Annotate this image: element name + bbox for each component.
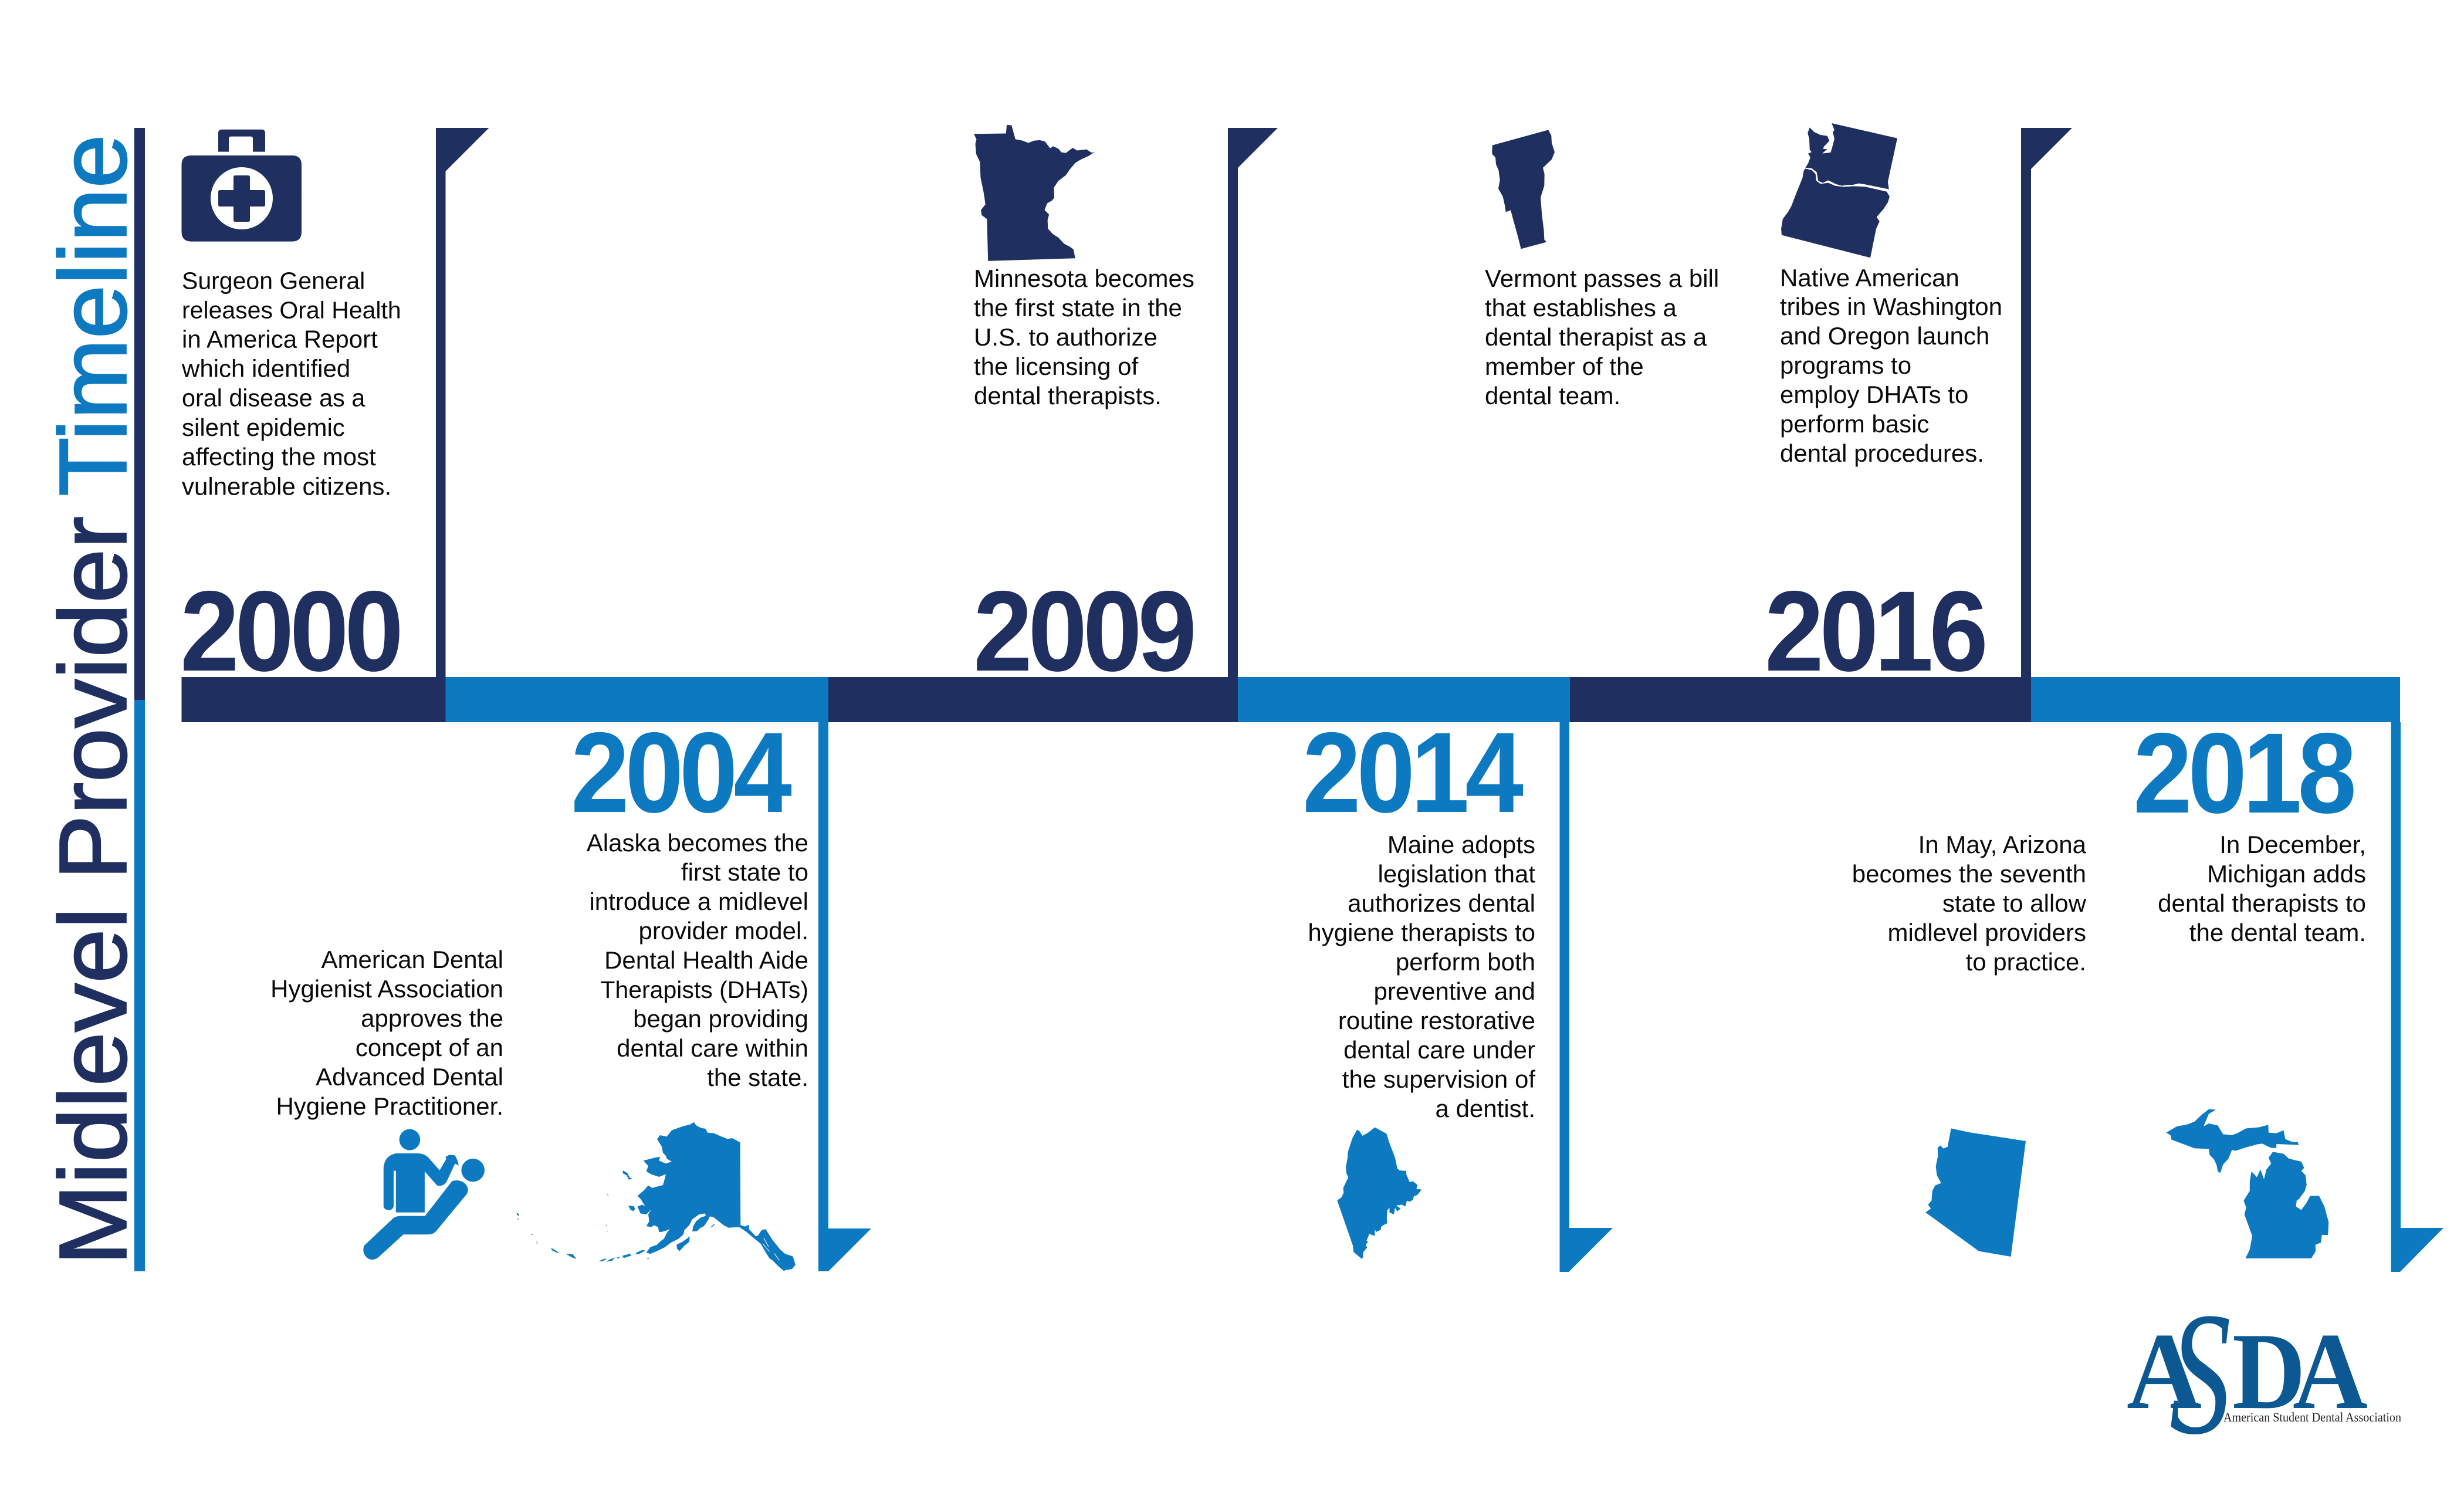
description: American Dental Hygienist Association: approves the: [361, 1004, 503, 1032]
year 2000: 2000: [180, 567, 400, 695]
description: Vermont: dental team.: [1485, 382, 1620, 409]
description 2000: which identified: [181, 354, 350, 383]
year 2016: 2016: [1765, 567, 1985, 695]
description: Maine: routine restorative: [1338, 1007, 1535, 1034]
description 2009: U.S. to authorize: [974, 323, 1157, 351]
description: Maine: hygiene therapists to: [1308, 919, 1535, 946]
panel: 2014: [1302, 708, 1613, 1272]
description: American Dental Hygienist Association: concept of an: [356, 1034, 503, 1061]
description: Arizona: state to allow: [1942, 889, 2087, 917]
description: Michigan: Michigan adds: [2207, 860, 2366, 888]
description: Maine: dental care under: [1343, 1036, 1535, 1064]
description: Maine: authorizes dental: [1348, 889, 1535, 917]
description 2016: dental procedures.: [1780, 439, 1984, 467]
description: Alaska: the state.: [707, 1064, 808, 1091]
description: Alaska: Dental Health Aide: [604, 946, 808, 974]
description: Vermont: Vermont passes a bill: [1485, 265, 1719, 292]
logo: ASDA: S: [2169, 1277, 2231, 1471]
logo: ASDA: American Student Dental Association: [2223, 1410, 2401, 1424]
description: Alaska: Therapists (DHATs): [600, 976, 808, 1003]
description: Michigan: In December,: [2219, 831, 2366, 858]
description: Arizona: to practice.: [1966, 948, 2086, 976]
description: Michigan: dental therapists to: [2158, 889, 2366, 917]
description: Arizona: midlevel providers: [1888, 919, 2086, 946]
description: American Dental Hygienist Association: Hygienist Association: [270, 975, 503, 1003]
description: American Dental Hygienist Association: Hygiene Practitioner.: [276, 1092, 503, 1120]
flag marker 2014: [1559, 722, 1613, 1272]
description: Alaska: provider model.: [639, 917, 808, 945]
year 2018: 2018: [2133, 709, 2354, 837]
description 2000: oral disease as a: [182, 385, 365, 412]
panel: 2014 Vermont: [1485, 130, 1719, 409]
description: Alaska: introduce a midlevel: [589, 888, 808, 915]
description 2000: silent epidemic: [182, 414, 345, 441]
description: Maine: the supervision of: [1342, 1065, 1535, 1093]
description 2009: the licensing of: [974, 353, 1139, 380]
description: Michigan: the dental team.: [2189, 919, 2366, 946]
description 2016: tribes in Washington: [1780, 293, 2002, 320]
icon: hygienist with patient: [363, 1129, 485, 1260]
description: Maine: legislation that: [1377, 860, 1535, 888]
description: Arizona: becomes the seventh: [1852, 860, 2086, 888]
map: Arizona: [1925, 1128, 2026, 1257]
panel: 2016: [1765, 123, 2072, 695]
description 2009: Minnesota becomes: [974, 265, 1194, 292]
description: Alaska: dental care within: [617, 1034, 808, 1062]
description: Alaska: began providing: [633, 1005, 808, 1033]
panel: 2000: [180, 128, 489, 695]
title side rule: [134, 128, 145, 1271]
timeline horizontal bar: [182, 677, 2400, 722]
title: Midlevel Provider Timeline: [39, 134, 147, 1265]
description 2016: and Oregon launch: [1780, 322, 1989, 350]
description: Alaska: first state to: [681, 858, 808, 886]
panel: 2009: [973, 125, 1278, 695]
description: Alaska: Alaska becomes the: [587, 829, 808, 857]
description 2000: in America Report: [182, 325, 378, 353]
logo: ASDA: [2127, 1277, 2401, 1471]
year 2009: 2009: [973, 567, 1193, 695]
flag marker 2004: [818, 722, 871, 1271]
map: Minnesota: [974, 125, 1094, 261]
year 2004: 2004: [571, 708, 792, 837]
description: Vermont: member of the: [1485, 353, 1644, 380]
description 2000: releases Oral Health: [182, 297, 401, 324]
description 2016: Native American: [1780, 264, 1959, 292]
description: Maine: Maine adopts: [1387, 831, 1535, 858]
description 2000: Surgeon General: [182, 268, 365, 295]
flag marker 2000: [436, 128, 489, 677]
flag marker 2018: [2391, 722, 2443, 1272]
title: Midlevel Provider Timeline: Midlevel Provider: [39, 516, 147, 1265]
description 2016: programs to: [1780, 351, 1911, 379]
description: Arizona: In May, Arizona: [1918, 831, 2087, 858]
map: Washington and Oregon: [1781, 123, 1897, 258]
logo: ASDA: A: [2127, 1311, 2202, 1432]
description: Maine: a dentist.: [1436, 1095, 1535, 1122]
flag marker 2009: [1228, 128, 1278, 677]
description 2000: affecting the most: [182, 443, 376, 471]
map: Alaska: [517, 1122, 796, 1271]
description 2016: employ DHATs to: [1780, 381, 1968, 408]
description: Maine: preventive and: [1373, 977, 1535, 1005]
description 2009: the first state in the: [974, 294, 1182, 321]
panel: 2004: [270, 708, 871, 1271]
map: Vermont: [1492, 130, 1555, 249]
map: Michigan: [2166, 1109, 2328, 1258]
logo: ASDA: D: [2232, 1311, 2306, 1432]
description: Maine: perform both: [1396, 948, 1535, 976]
description: Vermont: dental therapist as a: [1485, 323, 1707, 351]
description: Vermont: that establishes a: [1485, 294, 1677, 321]
description 2016: perform basic: [1780, 410, 1929, 438]
icon: first aid kit: [182, 130, 302, 242]
description: American Dental Hygienist Association: American Dental: [321, 946, 503, 973]
year 2014: 2014: [1302, 708, 1524, 837]
description 2009: dental therapists.: [974, 382, 1162, 409]
flag marker 2016: [2021, 128, 2072, 677]
panel: 2018: [1852, 709, 2443, 1272]
map: Maine: [1337, 1128, 1421, 1259]
title: Midlevel Provider Timeline: Timeline: [39, 134, 147, 496]
logo: ASDA: A: [2293, 1311, 2368, 1432]
description 2000: vulnerable citizens.: [182, 473, 391, 500]
description: American Dental Hygienist Association: Advanced Dental: [316, 1063, 503, 1091]
